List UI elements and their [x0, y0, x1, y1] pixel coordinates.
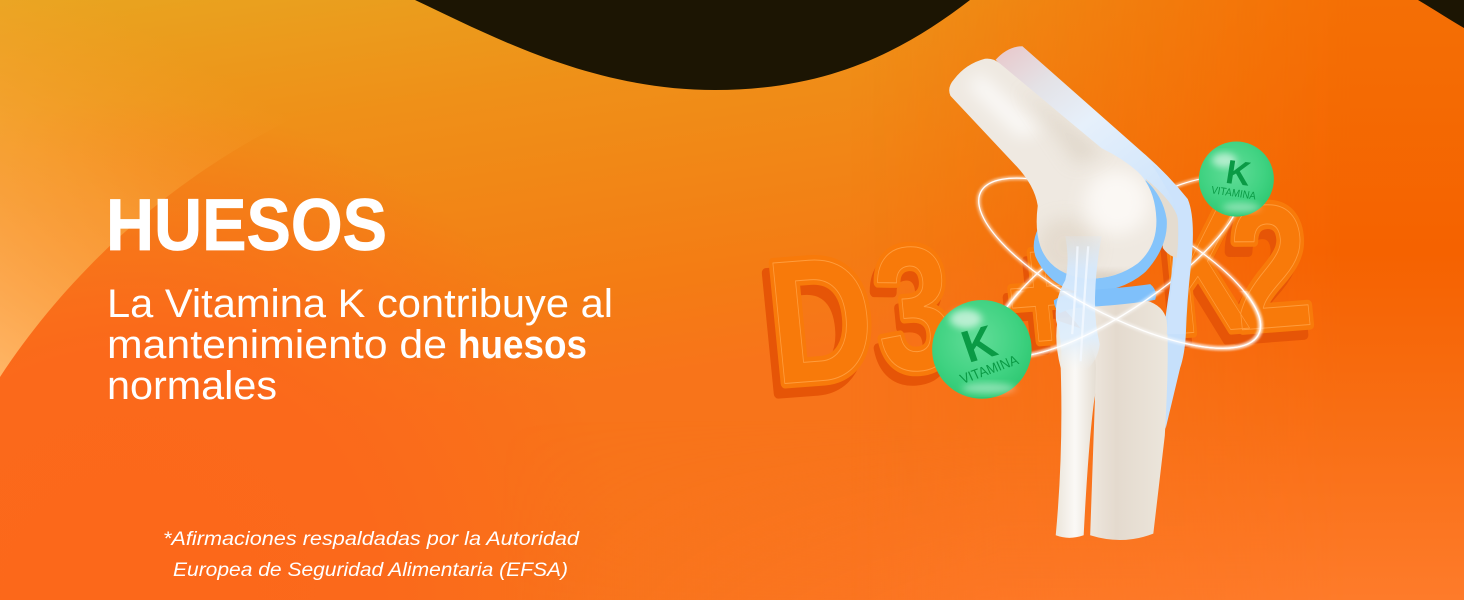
- patella behind tendon: [1146, 179, 1178, 258]
- letter inline outlines: +: [997, 193, 1085, 394]
- tendon strands over joint: [1151, 164, 1193, 334]
- femur: [949, 59, 1156, 286]
- meniscus upper ring: [1034, 180, 1167, 293]
- tibia: [1065, 300, 1168, 540]
- meniscus lower disc: [1054, 284, 1156, 313]
- fibula: [1056, 321, 1099, 538]
- vitamin K sphere large: VITAMINA: [958, 352, 1021, 387]
- vitamin K sphere large: [932, 300, 1032, 399]
- letter faces: D: [760, 218, 883, 422]
- vitamin K sphere small: VITAMINA: [1210, 184, 1258, 203]
- glowing orbit rings front: [1004, 290, 1264, 358]
- letter inline outlines: 3: [866, 208, 962, 409]
- letter shadow layer: 2: [1216, 176, 1314, 378]
- letter inline outlines: [760, 166, 1319, 422]
- footnote: Europea de Seguridad Alimentaria (EFSA): [173, 560, 568, 581]
- illustration: knee with vitamins: [753, 46, 1319, 540]
- back tendon: [996, 46, 1193, 429]
- letter faces: K: [1155, 169, 1254, 372]
- 3D lettering D3+K2: [753, 166, 1319, 432]
- description text: [107, 282, 613, 408]
- description text: La Vitamina K contribuye al: [107, 282, 613, 326]
- front ligament: [1056, 236, 1102, 371]
- footnote: [163, 529, 581, 581]
- description text: normales: [107, 364, 277, 408]
- letter shadow layer: D: [753, 228, 876, 432]
- letter shadow layer: K: [1150, 180, 1249, 382]
- description text: mantenimiento de: [107, 323, 447, 367]
- letter faces: 2: [1222, 166, 1319, 367]
- vitamin K sphere large: K: [955, 315, 1003, 372]
- dark top wave: [415, 0, 1464, 90]
- letter faces: [760, 166, 1319, 422]
- vitamin K sphere small: [1199, 142, 1274, 217]
- letter faces: +: [997, 193, 1085, 394]
- letter shadow layer: [753, 176, 1314, 432]
- letter shadow layer: +: [992, 202, 1080, 404]
- glowing orbit rings back: [952, 147, 1287, 383]
- vitamin K sphere small: K: [1223, 154, 1253, 194]
- footnote: *Afirmaciones respaldadas por la Autoridad: [163, 529, 581, 550]
- title: HUESOS: [106, 185, 387, 266]
- letter inline outlines: K: [1155, 169, 1254, 372]
- letter faces: 3: [866, 208, 962, 409]
- letter shadow layer: 3: [862, 217, 958, 419]
- letter inline outlines: D: [760, 218, 883, 422]
- letter inline outlines: 2: [1222, 166, 1319, 367]
- description text: huesos: [458, 323, 587, 367]
- background light wave: [0, 0, 490, 377]
